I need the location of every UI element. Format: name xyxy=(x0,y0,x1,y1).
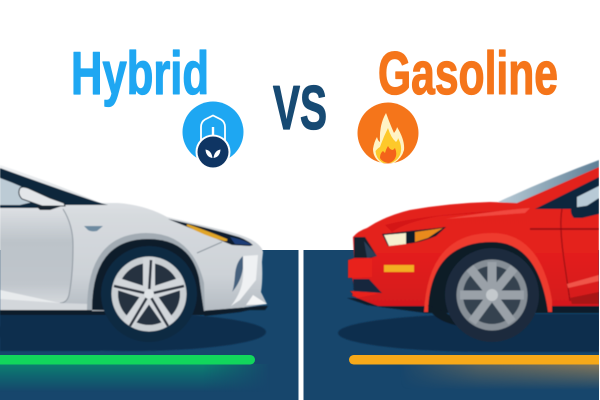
car shadow xyxy=(0,313,266,351)
under body xyxy=(347,298,599,313)
door xyxy=(0,209,73,303)
gasoline line xyxy=(349,355,600,364)
wheel xyxy=(101,246,197,342)
road panel: hybrid xyxy=(0,250,298,400)
under body xyxy=(0,306,268,315)
wheel arch xyxy=(424,233,552,312)
right edge strip xyxy=(599,0,600,400)
car shadow xyxy=(338,314,600,352)
windshield xyxy=(498,160,599,206)
car body xyxy=(0,165,267,311)
window xyxy=(0,168,108,208)
road panel: gasoline xyxy=(304,250,600,400)
title: Hybrid: Hybrid xyxy=(71,40,209,107)
red gasoline car xyxy=(338,160,600,352)
door seam xyxy=(561,209,570,301)
headlight xyxy=(382,227,446,246)
wheel arch xyxy=(87,233,205,311)
car body xyxy=(348,167,599,306)
mirror xyxy=(571,204,599,218)
lower grille xyxy=(353,279,382,295)
window xyxy=(535,177,599,209)
icon: hybrid battery lock with leaf xyxy=(182,102,244,170)
headlight xyxy=(168,219,253,246)
side marker xyxy=(384,265,414,272)
wheel xyxy=(445,248,539,342)
mirror xyxy=(19,187,65,206)
hybrid line xyxy=(0,355,255,364)
grille xyxy=(354,237,377,258)
bumper xyxy=(348,258,372,278)
icon: gasoline flame xyxy=(358,102,418,164)
badge xyxy=(84,226,103,231)
title: VS: VS xyxy=(273,74,327,143)
front bumper detail xyxy=(197,242,222,253)
silver hybrid car xyxy=(0,165,268,351)
